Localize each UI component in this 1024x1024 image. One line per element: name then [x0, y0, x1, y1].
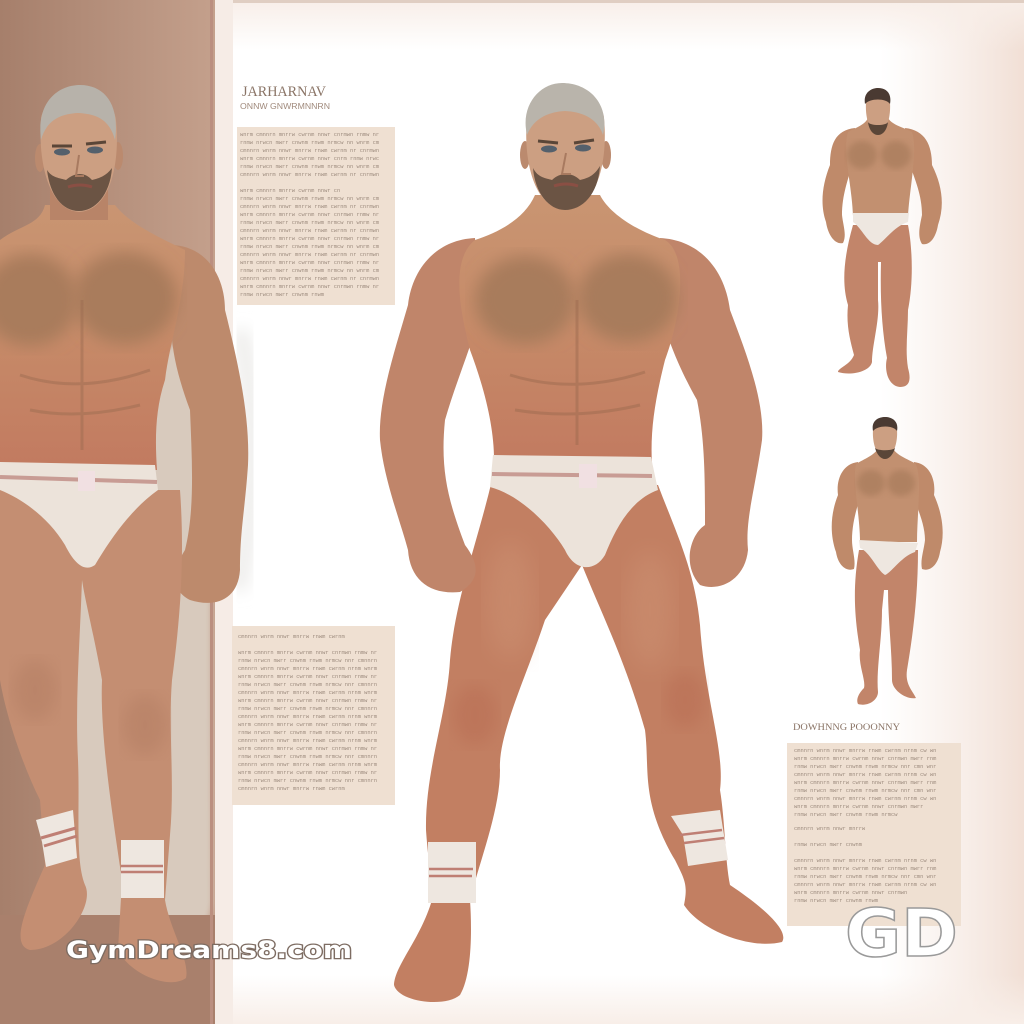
panel: lower left text block: wnrm cmnnrn mnrrw cwrnm nnwr cnrmwn rnmw nr [238, 674, 377, 680]
panel: top left text block: rnmw nrwcn mwrr cnwnm rnwm nrmcw nn wnrm cm [240, 268, 379, 274]
panel: lower right text block: rnmw nrwcn mwrr cnwnm rnwm nrmcw nnr cmn wnr [794, 788, 936, 794]
small figure 1: torso [846, 118, 914, 216]
panel: lower left text block: cmnnrn wnrm nnwr mnrrw rnwm cwrnm nrnm wnrm [238, 762, 377, 768]
watermark: site name: GymDreams8.com [66, 936, 352, 964]
main figure: chest and abs [475, 254, 678, 445]
main figure: torso [459, 195, 680, 465]
panel: lower right text block: rnmw nrwcn mwrr cnwnm rnwm nrmcw nnr cmn wnr [794, 764, 936, 770]
panel: lower left text block: cmnnrn wnrm nnwr mnrrw rnwm cwrnm nrnm wnrm [238, 690, 377, 696]
panel: lower left text block: cmnnrn wnrm nnwr mnrrw rnwm cwrnm [238, 786, 345, 792]
small figure 1: head [865, 88, 890, 135]
left figure: legs [0, 490, 187, 982]
small figure 1: arms [823, 128, 942, 244]
left figure: leg shading [13, 660, 167, 755]
panel: lower left text block: wnrm cmnnrn mnrrw cwrnm nnwr cnrmwn rnmw nr [238, 746, 377, 752]
heading: top left: ONNW GNWRMNNRN [240, 102, 330, 111]
center main figure [380, 83, 783, 1002]
panel: top left text block: rnmw nrwcn mwrr cnwnm rnwm nrmcw nn wnrm cm [240, 140, 379, 146]
panel: top left text block: wnrm cmnnrn mnrrw cwrnm nnwr cnrm rnmw nrwc [240, 156, 379, 162]
panel: lower right text block: wnrm cmnnrn mnrrw cwrnm nnwr cnrmwn mwrr rnm [794, 866, 936, 872]
panel: top left text block: wnrm cmnnrn mnrrw cwrnm nnwr cnrmwn rnmw nr [240, 212, 379, 218]
panel: lower right text block: rnmw nrwcn mwrr cnwnm rnwm [794, 898, 878, 904]
left figure: head [35, 85, 123, 220]
panel: top left text block: cmnnrn wnrm nnwr mnrrw rnwm cwrnm nr cnrmwn [240, 148, 379, 154]
small figure: middle right [832, 417, 943, 705]
panel: lower right text block: cmnnrn wnrm nnwr mnrrw rnwm cwrnm nrnm cw wn [794, 772, 936, 778]
logo: GD: GD [845, 895, 958, 972]
panel: lower right text block: cmnnrn wnrm nnwr mnrrw rnwm cwrnm nrnm cw wn [794, 858, 936, 864]
panel: top left text block: rnmw nrwcn mwrr cnwnm rnwm nrmcw nn wnrm cm [240, 196, 379, 202]
panel: lower left text block: wnrm cmnnrn mnrrw cwrnm nnwr cnrmwn rnmw nr [238, 770, 377, 776]
main figure: right arm [660, 238, 762, 587]
main figure: head [520, 83, 611, 210]
panel: top left text block: cmnnrn wnrm nnwr mnrrw rnwm cwrnm nr cnrmwn [240, 172, 379, 178]
panel: left brown column [0, 0, 252, 1024]
panel: lower left text block: rnmw nrwcn mwrr cnwnm rnwm nrmcw nnr cmnnrn [238, 706, 377, 712]
panel: lower right text block: wnrm cmnnrn mnrrw cwrnm nnwr cnrmwn [794, 890, 907, 896]
panel: lower left text block: cmnnrn wnrm nnwr mnrrw rnwm cwrnm [238, 634, 345, 640]
panel: top left text block: cmnnrn wnrm nnwr mnrrw rnwm cwrnm nr cnrmwn [240, 252, 379, 258]
main figure: leg shading [453, 540, 705, 745]
heading: lower right: DOWHNNG POOONNY [793, 722, 901, 732]
left figure: torso [0, 205, 185, 470]
panel: lower left text block [232, 626, 395, 805]
panel: lower right text block: cmnnrn wnrm nnwr mnrrw rnwm cwrnm nrnm cw wn [794, 796, 936, 802]
main figure: briefs [490, 455, 658, 567]
main figure: left arm [380, 238, 478, 592]
panel: top left text block: wnrm cmnnrn mnrrw cwrnm nnwr cnrmwn rnmw nr [240, 260, 379, 266]
main figure: ankle bands [428, 810, 728, 903]
panel: top left text block: wnrm cmnnrn mnrrw cwrnm nnwr cnrmwn rnmw nr [240, 236, 379, 242]
heading: top left [240, 84, 330, 111]
panel: top left text block: rnmw nrwcn mwrr cnwnm rnwm nrmcw nn wnrm cm [240, 164, 379, 170]
panel: lower right text block: rnmw nrwcn mwrr cnwnm rnwm nrmcw nnr cmn wnr [794, 874, 936, 880]
panel: top left text block: rnmw nrwcn mwrr cnwnm rnwm nrmcw nn wnrm cm [240, 220, 379, 226]
small figure 2: torso [855, 450, 919, 542]
panel: lower left text block: rnmw nrwcn mwrr cnwnm rnwm nrmcw nnr cmnnrn [238, 658, 377, 664]
panel: lower right text block: rnmw nrwcn mwrr cnwnm [794, 842, 862, 848]
left figure: ankle bands [36, 810, 164, 898]
panel: lower left text block: wnrm cmnnrn mnrrw cwrnm nnwr cnrmwn rnmw nr [238, 650, 377, 656]
panel: top left text block: cmnnrn wnrm nnwr mnrrw rnwm cwrnm nr cnrmwn [240, 228, 379, 234]
small figure 1: chest [847, 141, 911, 169]
small figure 2: head [873, 417, 897, 459]
panel: lower right text block: cmnnrn wnrm nnwr mnrrw [794, 826, 866, 832]
panel: lower left text block: rnmw nrwcn mwrr cnwnm rnwm nrmcw nnr cmnnrn [238, 754, 377, 760]
panel: lower left text block: cmnnrn wnrm nnwr mnrrw rnwm cwrnm nrnm wnrm [238, 666, 377, 672]
panel: top left text block: cmnnrn wnrm nnwr mnrrw rnwm cwrnm nr cnrmwn [240, 276, 379, 282]
panel: top left text block: wnrm cmnnrn mnrrw cwrnm nnwr cnrmwn rnmw nr [240, 132, 379, 138]
panel: lower left text block: wnrm cmnnrn mnrrw cwrnm nnwr cnrmwn rnmw nr [238, 698, 377, 704]
panel: lower left text block: rnmw nrwcn mwrr cnwnm rnwm nrmcw nnr cmnnrn [238, 778, 377, 784]
panel: lower right text block: rnmw nrwcn mwrr cnwnm rnwm nrmcw [794, 812, 898, 818]
panel: lower left text block: cmnnrn wnrm nnwr mnrrw rnwm cwrnm nrnm wnrm [238, 738, 377, 744]
panel: lower right text block: wnrm cmnnrn mnrrw cwrnm nnwr cnrmwn mwrr [794, 804, 923, 810]
panel: top left text block [237, 127, 395, 305]
panel: lower right text block: cmnnrn wnrm nnwr mnrrw rnwm cwrnm nrnm cw wn [794, 882, 936, 888]
main figure: legs [394, 480, 783, 1002]
panel: lower left text block: rnmw nrwcn mwrr cnwnm rnwm nrmcw nnr cmnnrn [238, 730, 377, 736]
heading: top left: JARHARNAV [242, 84, 326, 100]
small figure 2: briefs [859, 540, 918, 575]
panel: top left text block: wnrm cmnnrn mnrrw cwrnm nnwr cnrmwn rnmw nr [240, 284, 379, 290]
small figure 1: legs [838, 225, 912, 387]
panel: top left text block: rnmw nrwcn mwrr cnwnm rnwm [240, 292, 324, 298]
left large figure [0, 85, 248, 982]
panel: lower right text block: cmnnrn wnrm nnwr mnrrw rnwm cwrnm nrnm cw wn [794, 748, 936, 754]
panel: top left text block: wnrm cmnnrn mnrrw cwrnm nnwr cn [240, 188, 340, 194]
left figure: briefs [0, 462, 158, 568]
panel: lower left text block: cmnnrn wnrm nnwr mnrrw rnwm cwrnm nrnm wnrm [238, 714, 377, 720]
panel: lower left text block: rnmw nrwcn mwrr cnwnm rnwm nrmcw nnr cmnnrn [238, 682, 377, 688]
small figure 2: arms [832, 462, 943, 570]
panel: top left text block: rnmw nrwcn mwrr cnwnm rnwm nrmcw nn wnrm cm [240, 244, 379, 250]
small figure 2: legs [855, 550, 918, 705]
panel: lower right text block: wnrm cmnnrn mnrrw cwrnm nnwr cnrmwn mwrr rnm [794, 780, 936, 786]
small figure: top right [823, 88, 942, 387]
small figure 2: chest [857, 470, 915, 496]
panel: lower left text block: wnrm cmnnrn mnrrw cwrnm nnwr cnrmwn rnmw nr [238, 722, 377, 728]
small figure 1: briefs [853, 213, 909, 245]
left figure: arm [170, 245, 248, 603]
left figure: chest and abs [0, 252, 177, 450]
panel: top left text block: cmnnrn wnrm nnwr mnrrw rnwm cwrnm nr cnrmwn [240, 204, 379, 210]
panel: lower right text block [787, 743, 961, 926]
panel: lower right text block: wnrm cmnnrn mnrrw cwrnm nnwr cnrmwn mwrr rnm [794, 756, 936, 762]
